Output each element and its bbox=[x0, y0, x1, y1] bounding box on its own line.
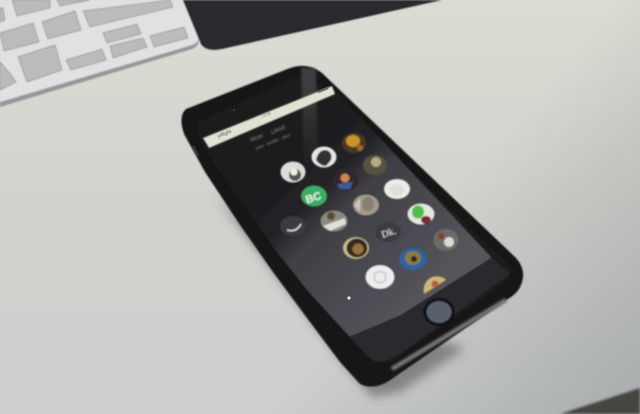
phone case bbox=[181, 66, 523, 387]
phone shadow bbox=[215, 195, 465, 397]
icon: clipped portrait bbox=[424, 276, 446, 294]
tabs: Liked bbox=[271, 125, 286, 136]
icon: green and red avatar bbox=[408, 204, 434, 224]
icon: gold avatar bbox=[342, 133, 366, 153]
icon: collage avatar bbox=[434, 229, 458, 251]
camera dot bbox=[233, 109, 235, 111]
icon: green badge bbox=[301, 186, 327, 206]
reflection streak bbox=[301, 68, 318, 170]
icon: blue and gold avatar bbox=[400, 248, 426, 270]
tabs bbox=[250, 125, 291, 151]
icon: portrait avatar bbox=[363, 155, 387, 175]
icon: Dk text badge bbox=[375, 222, 401, 242]
screen bbox=[204, 87, 492, 337]
tabs: year · profile · pics bbox=[255, 132, 291, 151]
dark object at bottom right corner bbox=[560, 388, 640, 414]
status bar: yrflight bbox=[217, 129, 233, 140]
icon: loading spinner bbox=[280, 216, 306, 236]
side button bbox=[193, 146, 198, 156]
icon: white hexagon badge bbox=[366, 265, 394, 289]
icon: white dog avatar bbox=[280, 162, 306, 182]
icon: silhouette avatar bbox=[312, 146, 336, 168]
icon: Dk text badge: Dk. bbox=[380, 226, 398, 241]
home area bbox=[350, 258, 510, 361]
home button bbox=[424, 298, 454, 326]
app icons bbox=[280, 133, 458, 294]
glass front bbox=[197, 76, 511, 363]
icon: colourful avatar bbox=[334, 170, 358, 190]
icon: white ring bbox=[384, 179, 410, 199]
status bar bbox=[203, 86, 335, 148]
phone bbox=[181, 66, 523, 387]
icon: green badge: BC bbox=[304, 190, 323, 206]
page dot bbox=[347, 296, 351, 300]
status bar: 12:00 bbox=[261, 110, 272, 119]
icon: landscape avatar bbox=[320, 210, 348, 232]
icon: pale portrait bbox=[353, 194, 379, 216]
dark tablet at top edge bbox=[183, 0, 442, 50]
tabs: Most bbox=[250, 133, 264, 144]
icon: headphones avatar bbox=[343, 237, 369, 259]
bottom edge highlight bbox=[392, 300, 506, 369]
keyboard bbox=[0, 0, 198, 107]
